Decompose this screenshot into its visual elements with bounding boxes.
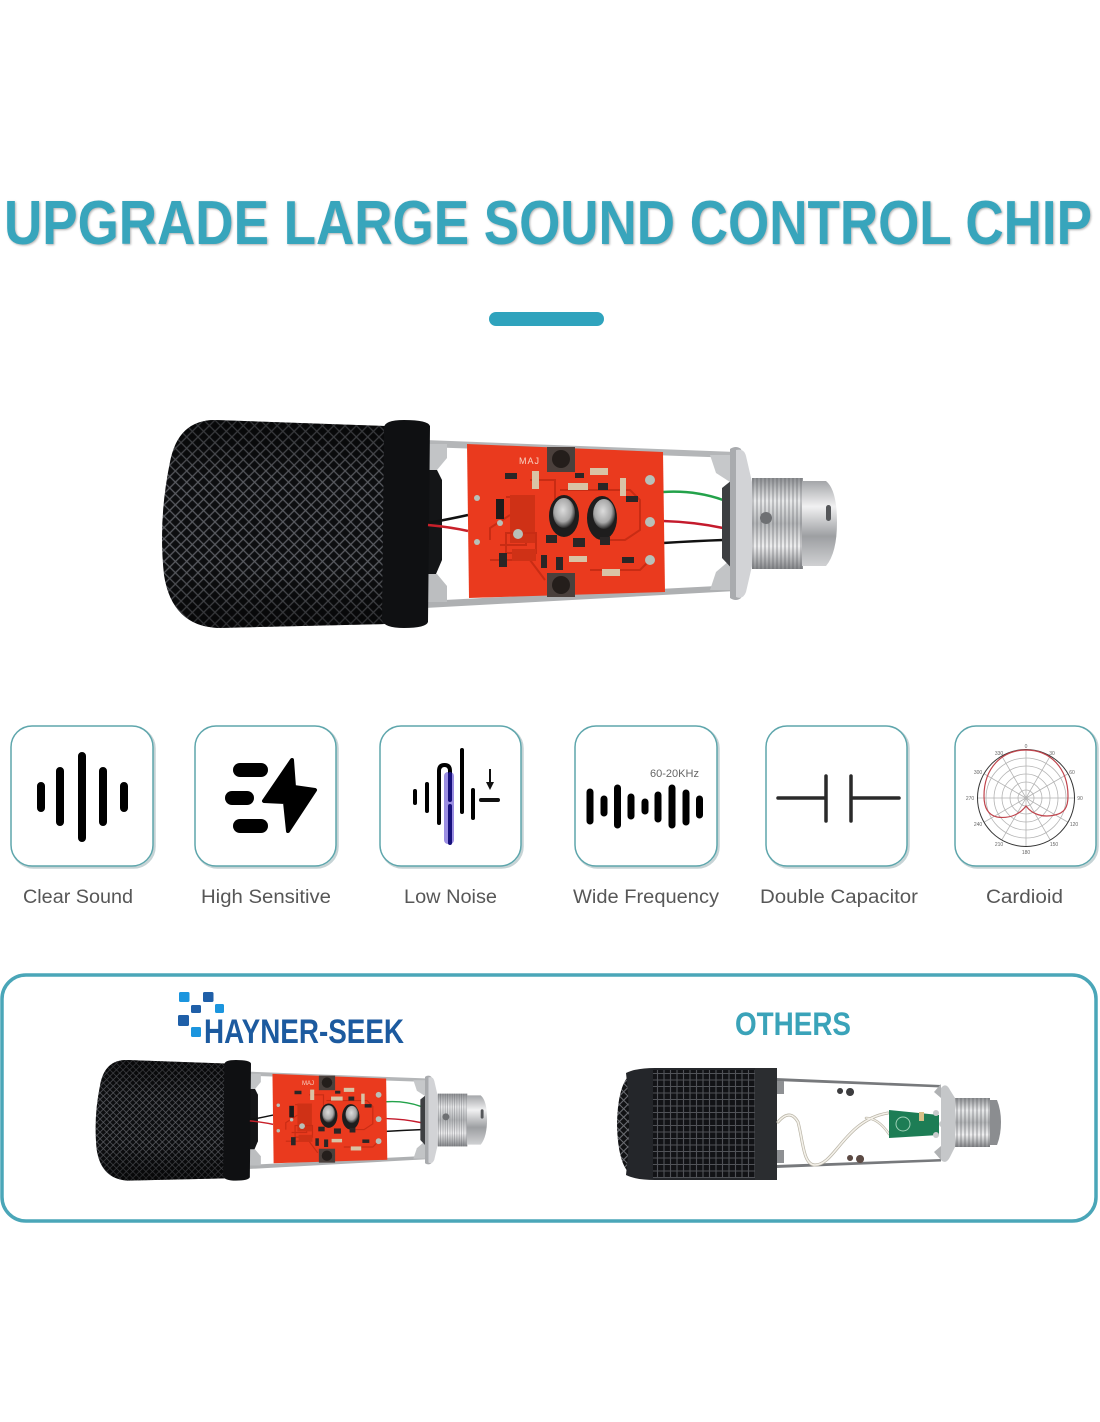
feature: clear sound (11, 726, 154, 908)
feature: low noise (380, 726, 522, 908)
icon box: cardioid polar chart: 270 (966, 796, 974, 802)
icon box: cardioid polar chart: 210 (995, 842, 1003, 848)
label: double capacitor: Double Capacitor (760, 887, 919, 908)
icon box: frequency waveform: 60-20KHz (650, 768, 699, 780)
icon box: cardioid polar chart: 240 (974, 822, 982, 828)
feature: cardioid (955, 726, 1098, 908)
brand logo: Hayner-Seek: HAYNER-SEEK (204, 1013, 404, 1051)
icon box: capacitor symbol (766, 726, 908, 868)
feature: wide frequency (573, 726, 720, 908)
competitor microphone with small green board (617, 1068, 1001, 1180)
icon box: cardioid polar chart: 330 (995, 751, 1003, 757)
icon box: cardioid polar chart: 120 (1070, 822, 1078, 828)
label: wide frequency: Wide Frequency (573, 887, 720, 908)
label: clear sound: Clear Sound (23, 887, 133, 908)
icon box: cardioid polar chart: 60 (1069, 770, 1075, 776)
icon box: cardioid polar chart: 0 (1025, 744, 1028, 750)
panel: brand comparison (2, 975, 1096, 1221)
icon box: cardioid polar chart: 90 (1077, 796, 1083, 802)
feature row (11, 726, 1098, 908)
small circuit board marking: MAJ (302, 1081, 314, 1087)
icon box: low noise waveform (380, 726, 522, 868)
brand microphone with large red board (96, 1060, 487, 1181)
icon box: cardioid polar chart: 300 (974, 770, 982, 776)
icon box: cardioid polar chart (955, 726, 1098, 868)
icon box: clear sound (11, 726, 154, 868)
label: low noise: Low Noise (404, 887, 497, 908)
heading: others: OTHERS (735, 1006, 851, 1042)
feature: high sensitive (195, 726, 338, 908)
feature: double capacitor (760, 726, 919, 908)
label: cardioid: Cardioid (986, 887, 1063, 908)
circuit board marking: MAJ (519, 456, 540, 466)
icon box: cardioid polar chart: 180 (1022, 850, 1030, 856)
brand logo: Hayner-Seek (178, 992, 404, 1051)
label: high sensitive: High Sensitive (201, 887, 331, 908)
title accent bar (489, 312, 604, 326)
icon box: lightning bolt and speed bars (195, 726, 338, 868)
icon box: frequency waveform (575, 726, 718, 868)
icon box: cardioid polar chart: 150 (1050, 842, 1058, 848)
icon box: cardioid polar chart: 30 (1049, 751, 1055, 757)
hero microphone with exposed red circuit board (162, 420, 837, 628)
